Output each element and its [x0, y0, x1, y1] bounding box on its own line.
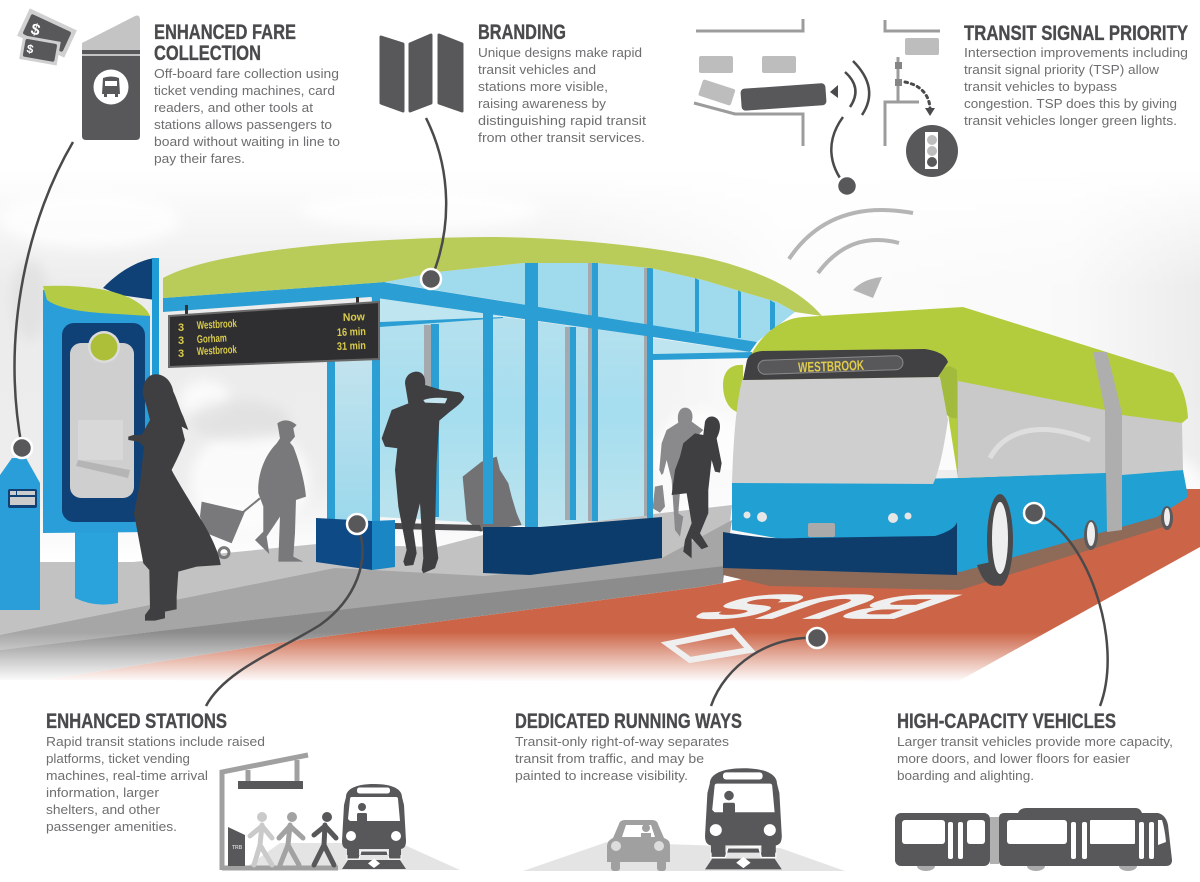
upper glass panes — [385, 263, 795, 342]
shelter — [163, 237, 822, 575]
headlights — [744, 512, 912, 523]
heading: running ways: DEDICATED RUNNING WAYS — [515, 710, 742, 733]
heading: branding: BRANDING — [478, 21, 566, 44]
text: stations — [46, 734, 265, 834]
arrival sign: Gorham — [197, 332, 227, 346]
person: woman — [128, 374, 221, 621]
lower glass — [380, 317, 653, 527]
person: walking commuter — [672, 416, 722, 558]
front mirrors — [723, 365, 743, 413]
icon: branding map — [381, 35, 462, 111]
arrival sign: 3 — [178, 322, 184, 334]
bus — [723, 307, 1188, 590]
text: branding — [478, 45, 646, 145]
arrival sign: Westbrook — [197, 344, 238, 358]
icon: station — [222, 755, 460, 870]
person: rear gray commuter — [653, 408, 703, 537]
frame shadows — [424, 263, 647, 521]
background: blurred street scene — [0, 170, 1200, 560]
arrival sign: Westbrook — [197, 318, 238, 332]
icon: tickets: $ — [29, 21, 42, 40]
bus blue body — [732, 470, 1188, 572]
icon: traffic signal — [906, 125, 958, 177]
callout: vehicles — [1024, 503, 1108, 706]
navy bumper — [723, 522, 957, 575]
text: fare: stations allows passengers to — [154, 117, 332, 132]
frame mullions — [163, 263, 775, 527]
text: fare: pay their fares. — [154, 151, 245, 166]
text: running ways: Transit-only right-of-way separates — [515, 734, 730, 749]
text: stations: machines, real-time arrival — [46, 768, 208, 783]
callout: running ways — [711, 628, 827, 706]
icon: station: TRB — [232, 845, 243, 851]
icon: tickets: $ — [26, 42, 35, 57]
text: fare: board without waiting in line to — [154, 134, 340, 149]
callout: stations — [206, 514, 367, 706]
road: red bus lane — [45, 489, 1200, 682]
text: signal priority — [964, 45, 1188, 128]
text: stations: shelters, and other — [46, 802, 161, 817]
text: vehicles: more doors, and lower floors for easier — [897, 751, 1131, 766]
text: stations: passenger amenities. — [46, 819, 177, 834]
text: stations: Rapid transit stations include raised — [46, 734, 265, 749]
diagram: intersection — [694, 19, 940, 146]
arrival sign: 3 — [178, 348, 184, 360]
icon: fare card — [82, 16, 140, 140]
person: trolley man — [200, 420, 306, 562]
icon: articulated bus — [895, 808, 1172, 871]
text: branding: stations more visible, — [478, 79, 608, 94]
text: stations: platforms, ticket vending — [46, 751, 190, 766]
bus shadow — [723, 510, 1170, 590]
bus header — [743, 349, 948, 380]
heading: stations: ENHANCED STATIONS — [46, 710, 227, 733]
arrival sign: 31 min — [337, 340, 366, 353]
text: signal priority: transit vehicles longer green lights. — [964, 113, 1177, 128]
text: running ways: transit from traffic, and may be — [515, 751, 704, 766]
heading: fare: ENHANCED FARE — [154, 21, 296, 44]
heading: fare — [154, 21, 296, 65]
text: vehicles — [897, 734, 1173, 783]
front planter — [316, 518, 395, 570]
roof — [163, 237, 822, 316]
callout: signal priority — [831, 117, 857, 196]
text: running ways — [515, 734, 730, 783]
arrival sign: 3 — [178, 335, 184, 347]
platform — [0, 505, 732, 680]
wireless signal arcs — [789, 210, 913, 298]
bus roof — [745, 307, 1188, 478]
arrival sign: Now — [343, 311, 365, 324]
text: fare: ticket vending machines, card — [154, 83, 335, 98]
text: fare — [154, 66, 340, 166]
front glass — [335, 310, 373, 522]
text: signal priority: congestion. TSP does this by giving — [964, 96, 1177, 111]
kiosk — [43, 258, 159, 605]
road marking: BUS — [661, 588, 988, 660]
text: branding: transit vehicles and — [478, 62, 596, 77]
text: vehicles: Larger transit vehicles provide more capacity, — [897, 734, 1173, 749]
heading: fare: COLLECTION — [154, 42, 261, 65]
heading: vehicles: HIGH-CAPACITY VEHICLES — [897, 710, 1116, 733]
text: branding: raising awareness by — [478, 96, 607, 111]
side windows — [958, 381, 1105, 478]
callout: fare — [12, 142, 73, 458]
text: fare: Off-board fare collection using — [154, 66, 339, 81]
road fade — [0, 632, 1200, 702]
windshield — [732, 377, 948, 484]
person: seated — [463, 457, 522, 532]
text: fare: readers, and other tools at — [154, 100, 313, 115]
license plate — [808, 523, 835, 537]
arrival sign: 16 min — [337, 326, 366, 339]
text: signal priority: Intersection improvements including — [964, 45, 1188, 60]
text: stations: information, larger — [46, 785, 160, 800]
text: branding: from other transit services. — [478, 130, 645, 145]
person: man with hand on head — [382, 372, 464, 573]
text: vehicles: boarding and alighting. — [897, 768, 1034, 783]
bus: WESTBROOK — [798, 357, 864, 375]
road marking: BUS: BUS — [661, 588, 988, 626]
callout: branding — [421, 118, 446, 289]
arrival sign — [169, 297, 379, 367]
text: running ways: painted to increase visibility. — [515, 768, 688, 783]
icon: car and bus lane — [523, 768, 845, 871]
text: branding: distinguishing rapid transit — [478, 113, 646, 128]
rear planter — [483, 517, 662, 575]
middle glass band — [370, 297, 503, 325]
ticket vending machine — [0, 458, 40, 610]
bench — [395, 523, 482, 531]
text: signal priority: transit signal priority (TSP) allow — [964, 62, 1160, 77]
text: signal priority: transit vehicles to bypass — [964, 79, 1118, 94]
articulation — [1093, 352, 1122, 532]
wheels — [977, 560, 1000, 586]
text: branding: Unique designs make rapid — [478, 45, 642, 60]
icon: tickets — [17, 8, 77, 65]
